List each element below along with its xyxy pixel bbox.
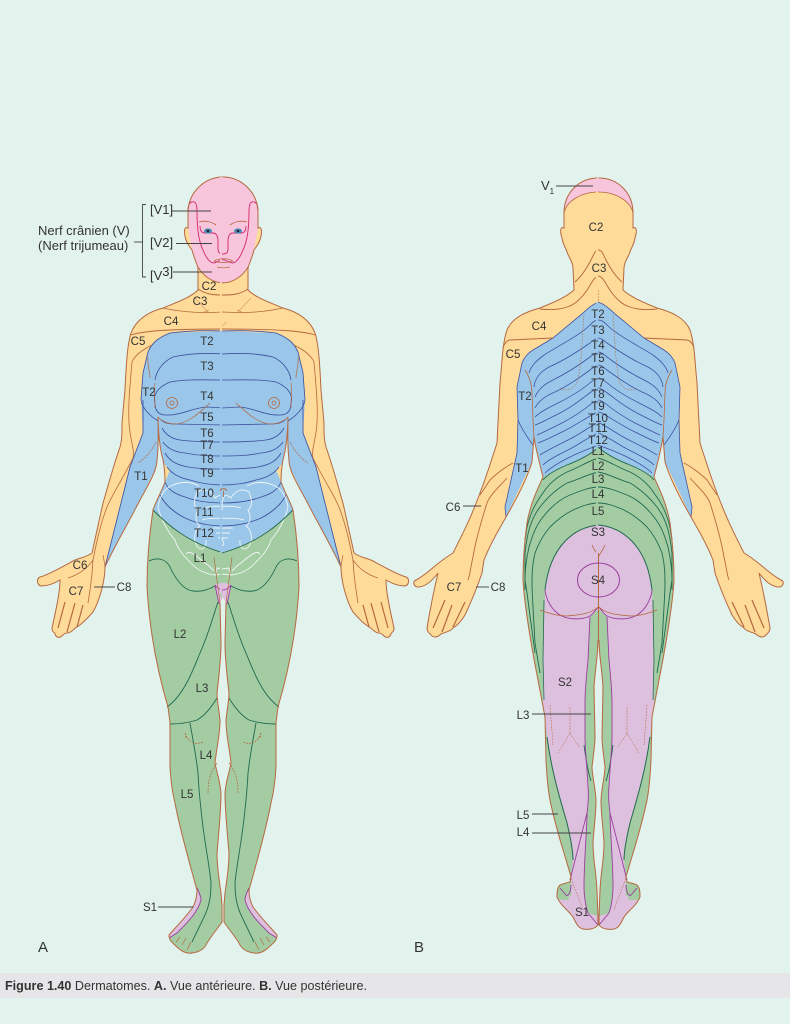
purple S1 and genital outlines [169,585,224,938]
labels: back dermatomes: C6 [446,502,460,514]
V1 cap line [564,192,599,213]
labels: back dermatomes: L5 [592,506,604,518]
labels: front dermatomes: T2 [200,336,214,348]
labels: cranial nerve: 3] [162,264,173,279]
labels: front dermatomes [69,281,216,914]
region: lumbar green [515,447,601,930]
labels: front dermatomes: T5 [200,412,214,424]
white pelvis and intestine skeleton lines [158,482,224,575]
labels: back dermatomes: T11 [589,423,607,435]
region: sacral purple [543,525,601,945]
labels: cranial nerve: Nerf crânien (V) [38,223,130,238]
back figure: posterior dermatomes [400,170,790,945]
labels: front dermatomes: S1 [143,902,157,914]
region: cervical yellow [20,170,226,650]
region: S1 foot purple [165,888,201,938]
green L dermatome lines [149,510,224,942]
labels: front dermatomes: T3 [200,361,214,373]
caption text: Figure 1.40 Dermatomes. A. Vue antérieure. B. Vue postérieure. [5,978,367,993]
mirrored front half [220,170,426,960]
labels: cranial nerve [38,202,173,283]
back T lines [505,302,599,517]
labels: front dermatomes: L1 [194,553,206,565]
labels: back dermatomes: L5 [517,810,529,822]
labels: front dermatomes: T4 [200,391,214,403]
jaw line [198,267,224,283]
labels: back dermatomes: T2 [518,391,532,403]
labels: front dermatomes: L2 [174,629,186,641]
labels: back dermatomes: S2 [558,677,572,689]
labels: back dermatomes: T7 [591,378,605,390]
front T and C dermatome lines [105,331,224,567]
back green L lines [525,447,599,860]
region: genital purple [215,583,226,604]
labels: back dermatomes: L3 [592,474,604,486]
labels: back dermatomes: S3 [591,527,605,539]
label: V1 back: 1 [550,187,555,196]
region: V1 pink cap [555,170,601,218]
caption band [0,973,790,998]
labels: back dermatomes: T5 [591,353,605,365]
labels: back dermatomes: T6 [591,366,605,378]
front figure: anterior dermatomes [20,170,426,960]
labels: back dermatomes: C3 [592,263,606,275]
back regions [400,170,601,945]
back purple S lines [545,590,598,925]
labels: back dermatomes: S4 [591,575,606,587]
labels: back dermatomes: T8 [591,389,605,401]
labels: back dermatomes: L4 [592,489,605,501]
labels: back dermatomes: C7 [447,582,461,594]
labels: back dermatomes: L2 [592,461,604,473]
mouth [214,259,233,268]
back skin lines [433,250,599,910]
navel [220,489,227,497]
back half body outline [414,178,598,929]
label: V1 back: V [541,178,550,193]
labels: front dermatomes: T12 [194,528,214,540]
labels: back dermatomes: S1 [575,907,589,919]
region: thoracic blue [105,331,226,567]
labels: front dermatomes: C8 [117,582,131,594]
eye [204,228,212,234]
labels: front dermatomes: T1 [134,471,148,483]
region: cervical yellow [400,170,601,650]
labels: back dermatomes: C2 [589,222,603,234]
labels: front dermatomes: T2 [142,387,156,399]
labels: front dermatomes: T7 [200,440,214,452]
labels: back dermatomes: C5 [506,349,520,361]
labels: cranial nerve: [V2] [150,235,173,250]
labels: back dermatomes: T9 [591,401,605,413]
labels: front dermatomes: T6 [200,428,214,440]
labels: cranial nerve: [V [150,268,162,283]
labels: front dermatomes: C5 [131,336,145,348]
labels: back dermatomes: T12 [588,435,608,447]
labels: back dermatomes: C4 [532,321,547,333]
labels: back dermatomes [446,222,608,919]
region: lumbar green [140,510,226,960]
labels: front dermatomes: L3 [196,683,208,695]
labels: cranial nerve: [V1] [150,202,173,217]
front regions [20,170,226,960]
labels: front dermatomes: C7 [69,586,83,598]
nipple [166,398,178,408]
labels: back dermatomes: L3 [517,710,529,722]
labels: front dermatomes: T9 [200,468,214,480]
labels: cranial nerve: (Nerf trijumeau) [38,238,128,253]
front half face lines [188,202,224,263]
labels: front dermatomes: T8 [200,454,214,466]
labels: front dermatomes: T10 [194,488,214,500]
region: thoracic blue [505,302,601,517]
mirrored back half [596,170,790,945]
labels: back dermatomes: C8 [491,582,505,594]
labels: front dermatomes: C3 [193,296,207,308]
region: ankle green wedge [560,877,571,896]
panel letter A: A [38,939,48,956]
labels: front dermatomes: T11 [195,507,213,519]
labels: front dermatomes: C2 [202,281,216,293]
region: trigeminal pink [180,170,226,283]
eyebrow [199,221,216,225]
labels: back dermatomes: T3 [591,325,605,337]
labels: front dermatomes: C6 [73,560,87,572]
labels: back dermatomes: T1 [515,463,529,475]
panel letter B: B [414,939,424,956]
labels: back dermatomes: L1 [592,446,604,458]
skin creases [58,289,224,950]
labels: front dermatomes: L5 [181,789,193,801]
labels: front dermatomes: C4 [164,316,179,328]
leader lines and trigeminal bracket [94,186,593,907]
labels: back dermatomes: T10 [588,413,608,425]
labels: front dermatomes: L4 [200,750,213,762]
S4 circle [578,563,620,597]
labels: back dermatomes: T4 [591,340,605,352]
labels: back dermatomes: T2 [591,309,605,321]
front half body outline [37,177,223,953]
labels: back dermatomes: L4 [517,827,530,839]
